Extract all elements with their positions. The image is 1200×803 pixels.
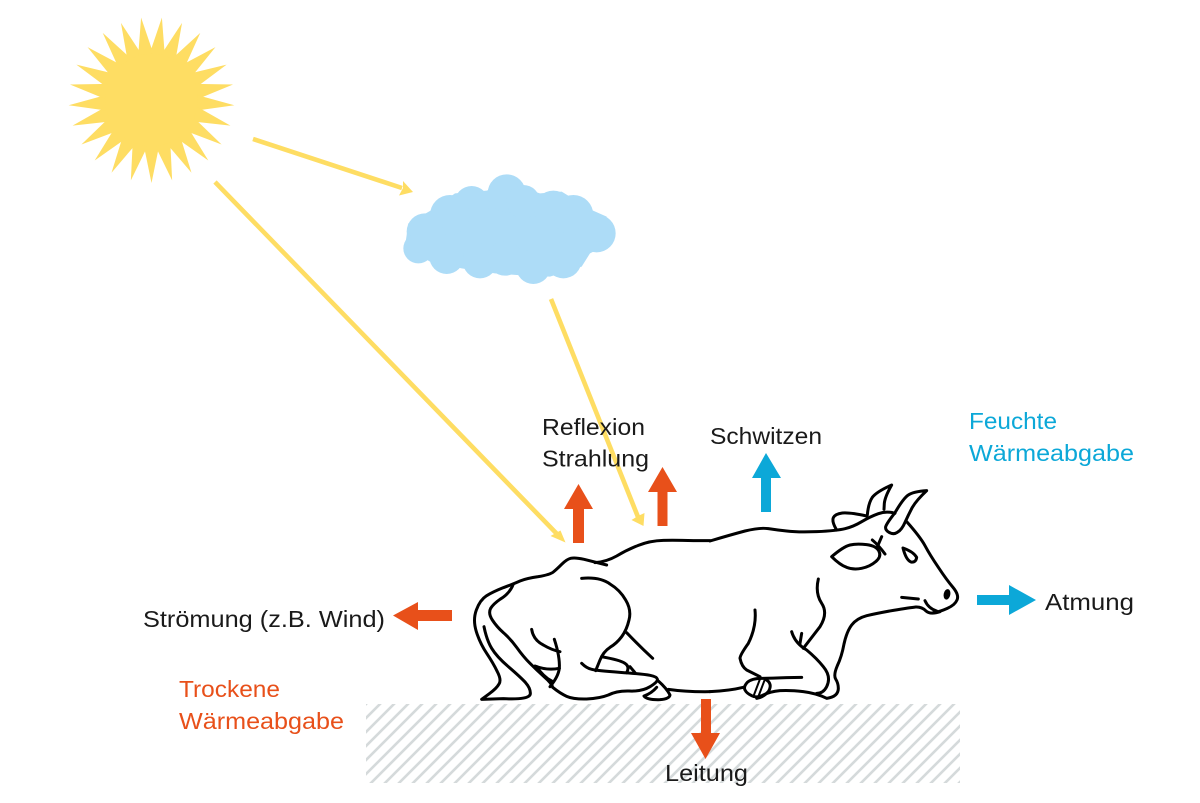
arrow: sun to cloud: [253, 139, 413, 196]
cow rear: [474, 540, 710, 700]
label: Leitung: Leitung: [665, 760, 748, 786]
arrow: Leitung down: [691, 699, 720, 759]
label: Reflexion Strahlung: Strahlung: [542, 446, 649, 472]
heading: Feuchte Wärmeabgabe: Feuchte: [969, 408, 1057, 434]
arrow: Strahlung up: [648, 467, 677, 526]
heading: Feuchte Wärmeabgabe: [969, 408, 1134, 466]
label: Atmung: Atmung: [1045, 589, 1134, 615]
arrow: Atmung right: [977, 585, 1036, 615]
arrow: sun to cow: [215, 182, 566, 542]
heading: Trockene Wärmeabgabe: [179, 676, 344, 734]
icon: cloud: [403, 174, 616, 284]
icon: sun: [68, 17, 235, 183]
label: Reflexion Strahlung: [542, 414, 649, 472]
heading: Trockene Wärmeabgabe: Trockene: [179, 676, 280, 702]
cow front: [710, 485, 958, 698]
arrow: Schwitzen up: [752, 453, 781, 512]
heading: Trockene Wärmeabgabe: Wärmeabgabe: [179, 708, 344, 734]
arrow: Strömung left: [393, 602, 452, 630]
label: Strömung: Strömung (z.B. Wind): [143, 606, 385, 632]
heading: Feuchte Wärmeabgabe: Wärmeabgabe: [969, 440, 1134, 466]
illustration: cow: [474, 485, 958, 700]
arrow: Reflexion up: [564, 484, 593, 543]
arrow: cloud to cow: [551, 299, 644, 526]
label: Schwitzen: Schwitzen: [710, 423, 822, 449]
label: Reflexion Strahlung: Reflexion: [542, 414, 645, 440]
panel: ground hatch: [366, 704, 960, 783]
